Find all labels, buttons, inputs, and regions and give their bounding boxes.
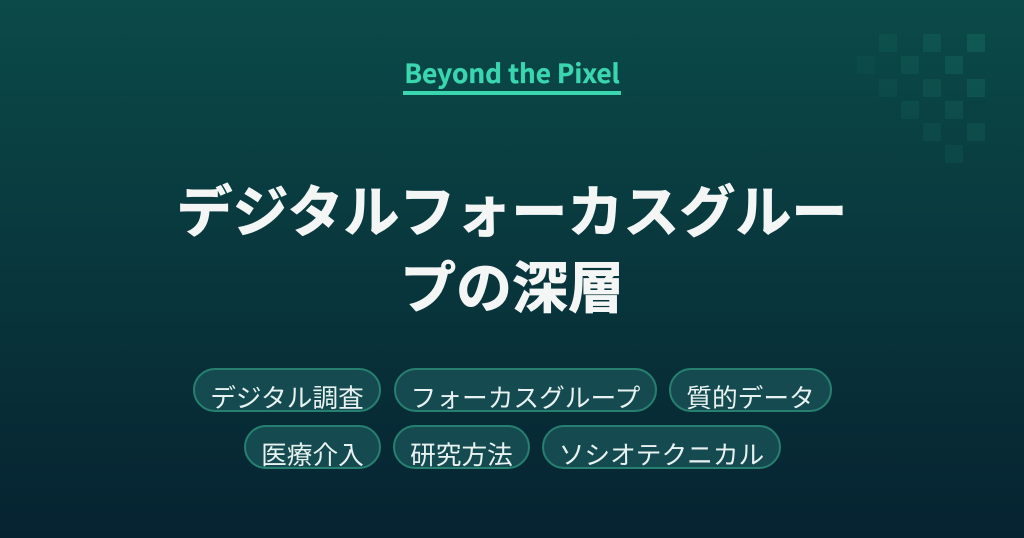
tag: 質的データ: 質的データ — [686, 378, 815, 415]
tag: 研究方法 — [393, 425, 530, 469]
title — [177, 168, 847, 324]
title: プの深層 — [400, 244, 624, 324]
decorative pixel grid icon — [901, 34, 985, 163]
tag: 医療介入 — [244, 425, 381, 469]
tag: フォーカスグループ: フォーカスグループ — [411, 378, 640, 415]
tag: デジタル調査: デジタル調査 — [210, 378, 364, 415]
tag: 質的データ — [669, 368, 832, 412]
tag: ソシオテクニカル — [542, 425, 781, 469]
tag: デジタル調査 — [193, 368, 381, 412]
tag: 医療介入: 医療介入 — [261, 435, 364, 472]
tag: ソシオテクニカル: ソシオテクニカル — [559, 435, 764, 472]
title: デジタルフォーカスグルー — [177, 168, 847, 249]
tag: フォーカスグループ — [394, 368, 657, 412]
tag: 研究方法: 研究方法 — [410, 435, 513, 472]
eyebrow heading: Beyond the Pixel: Beyond the Pixel — [404, 53, 620, 91]
